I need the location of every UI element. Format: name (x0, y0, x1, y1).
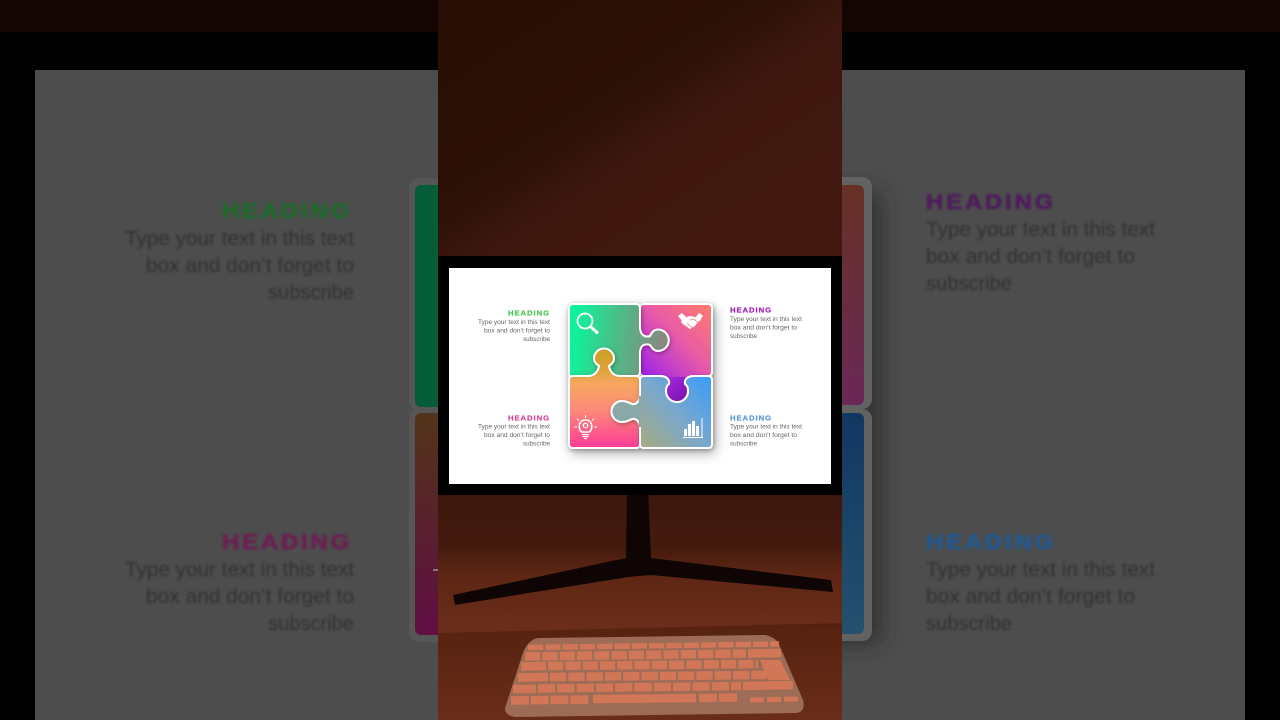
slide text: purple heading block: Type your text in this text (730, 316, 802, 323)
background text: pink block: subscribe (268, 613, 354, 635)
center photo: desk surface (438, 623, 842, 720)
slide text: pink heading block (478, 416, 551, 448)
slide text: pink heading block: Type your text in this text (478, 424, 550, 430)
puzzle knob: purple tab (661, 377, 693, 402)
slide text: pink heading block: box and don’t forget to (484, 432, 551, 439)
puzzle piece: top right purple coral (640, 304, 712, 402)
background text: green block: subscribe (268, 282, 354, 304)
background text: blue block (926, 531, 1155, 635)
monitor bezel (438, 256, 842, 495)
keyboard body (505, 635, 804, 717)
puzzle graphic (569, 304, 716, 454)
center photo: wall and shelf below monitor (438, 490, 842, 635)
center photo: wall above monitor (438, 0, 842, 260)
icon: magnifying glass (578, 314, 597, 332)
background text: green block: HEADING (222, 200, 352, 223)
puzzle piece: top left green (569, 304, 669, 376)
seam cover for blue tab base (639, 396, 641, 427)
background text: blue block: Type your text in this text (926, 559, 1155, 581)
background text: purple block: subscribe (926, 273, 1012, 295)
puzzle piece: bottom left orange pink (569, 349, 640, 448)
keyboard (505, 635, 804, 717)
background text: pink block: Type your text in this text (125, 559, 354, 581)
slide text: green heading block (478, 310, 551, 343)
background puzzle right pieces (832, 177, 872, 641)
puzzle knob: blue piece left tab (612, 396, 640, 427)
background text: purple block (926, 191, 1155, 295)
purple tab outline (660, 376, 694, 402)
background text: blue block: HEADING (926, 531, 1056, 554)
background text: purple block: box and don’t forget to (926, 246, 1135, 268)
slide text: blue heading block: Type your text in this text (730, 424, 802, 430)
slide text: purple heading block (730, 308, 802, 340)
background text: pink block: box and don’t forget to (146, 586, 354, 608)
slide text: purple heading block: box and don’t forget to (730, 324, 798, 332)
slide text: green heading block: box and don’t forget to (484, 328, 551, 334)
background puzzle left pieces (409, 178, 449, 642)
background text: blue block: subscribe (926, 613, 1012, 635)
icon: handshake (678, 313, 703, 329)
slide text: blue heading block: box and don’t forget to (730, 432, 798, 439)
slide text: blue heading block: subscribe (730, 440, 757, 448)
background text: blue block: box and don’t forget to (926, 586, 1135, 608)
slide text: purple heading block: HEADING (730, 308, 772, 314)
background text: pink block: HEADING (222, 531, 352, 554)
slide text: pink heading block: HEADING (508, 416, 550, 422)
slide text: blue heading block (730, 416, 802, 448)
background text: green block: Type your text in this text (125, 228, 354, 250)
monitor stand (453, 490, 833, 605)
slide text: blue heading block: HEADING (730, 416, 772, 422)
puzzle piece: bottom right blue (612, 376, 712, 448)
slide text: green heading block: HEADING (508, 310, 550, 318)
background text: green block: box and don’t forget to (146, 255, 354, 277)
keyboard key rows (511, 644, 798, 700)
icon: light bulb (574, 415, 597, 438)
background text: purple block: Type your text in this text (926, 219, 1155, 241)
background text: purple block: HEADING (926, 191, 1056, 214)
background puzzle shadow (800, 190, 882, 645)
background text: green block (125, 200, 354, 304)
icon: bar chart (683, 418, 703, 438)
puzzle overall shadow (570, 308, 716, 454)
slide text: pink heading block: subscribe (523, 440, 550, 448)
monitor screen slide (449, 268, 831, 484)
slide text: green heading block: subscribe (523, 336, 550, 343)
slide text: purple heading block: subscribe (730, 333, 757, 340)
background text: pink block (125, 531, 354, 635)
slide text: green heading block: Type your text in this text (478, 319, 550, 326)
